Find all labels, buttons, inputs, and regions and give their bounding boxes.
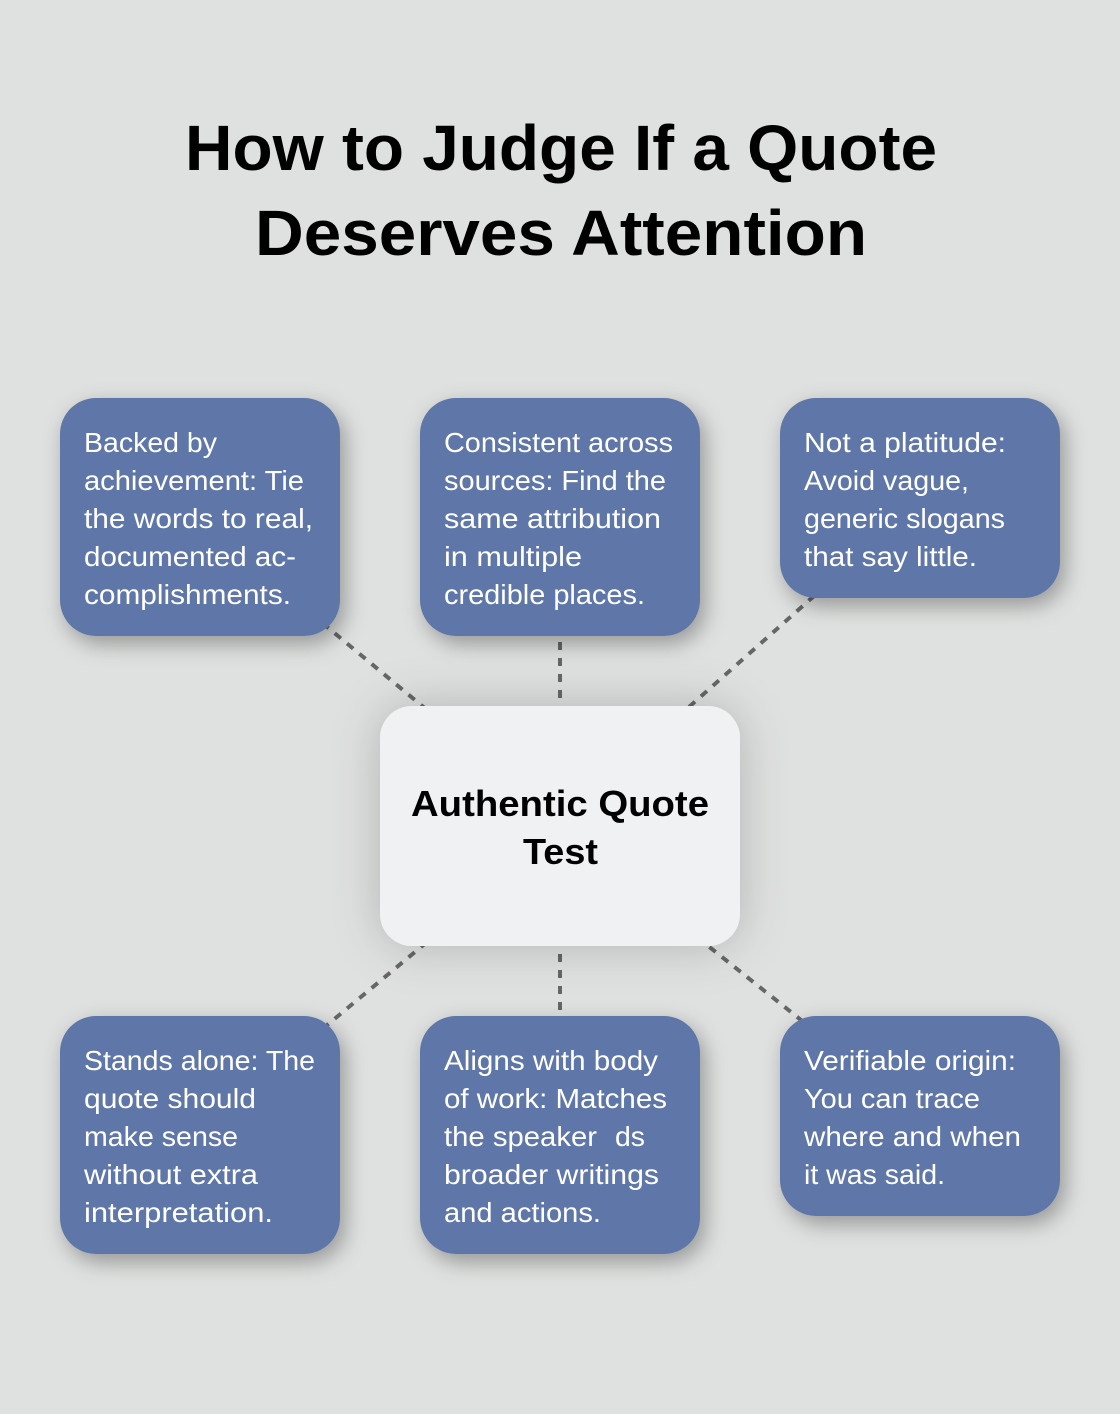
central box: authentic quote test: [380, 706, 740, 946]
panel: verifiable origin: Verifiable origin:: [804, 1045, 1016, 1076]
panel: verifiable origin: [780, 1016, 1060, 1216]
dashed connectors: [326, 596, 814, 1026]
panel: stands alone: make sense: [84, 1121, 238, 1152]
panel: aligns with body of work: ds: [615, 1121, 645, 1152]
panel: consistent across sources: credible places.: [444, 579, 645, 610]
panel: aligns with body of work: the speaker: [444, 1121, 597, 1152]
panel: stands alone: Stands alone: The: [84, 1045, 315, 1076]
panel: not a platitude: generic slogans: [804, 503, 1005, 534]
panel: aligns with body of work: broader writings: [444, 1159, 659, 1190]
panel: not a platitude: that say little.: [804, 541, 977, 572]
panel: backed by achievement: achievement: Tie: [84, 465, 304, 496]
panel: consistent across sources: sources: Find the: [444, 465, 666, 496]
panel: backed by achievement: the words to real,: [84, 503, 313, 534]
panel: backed by achievement: [60, 398, 340, 636]
panel: not a platitude: Avoid vague,: [804, 465, 969, 496]
panel: aligns with body of work: [420, 1016, 700, 1254]
panel: aligns with body of work: and actions.: [444, 1197, 601, 1228]
panel: backed by achievement: complishments.: [84, 579, 291, 610]
panel: stands alone: without extra: [83, 1159, 258, 1190]
panel: verifiable origin: it was said.: [804, 1159, 945, 1190]
title: Deserves Attention: [255, 197, 867, 269]
panel: stands alone: [60, 1016, 340, 1254]
panel: backed by achievement: documented ac-: [84, 541, 296, 572]
central box: authentic quote test: Authentic Quote: [411, 783, 709, 824]
panel: verifiable origin: You can trace: [804, 1083, 980, 1114]
panel: aligns with body of work: of work: Matches: [444, 1083, 667, 1114]
panel: aligns with body of work: Aligns with body: [444, 1045, 658, 1076]
panel: consistent across sources: same attribution: [444, 503, 661, 534]
title: How to Judge If a Quote: [185, 112, 937, 184]
central box: authentic quote test: Test: [523, 831, 598, 872]
panel: not a platitude: [780, 398, 1060, 598]
panel: stands alone: interpretation.: [84, 1197, 273, 1228]
panel: not a platitude: Not a platitude:: [804, 427, 1006, 458]
panel: stands alone: quote should: [84, 1083, 256, 1114]
panel: backed by achievement: Backed by: [84, 427, 217, 458]
panel: consistent across sources: in multiple: [444, 541, 582, 572]
panel: consistent across sources: [420, 398, 700, 636]
panel: consistent across sources: Consistent across: [444, 427, 673, 458]
title: [185, 112, 937, 269]
panel: verifiable origin: where and when: [803, 1121, 1021, 1152]
